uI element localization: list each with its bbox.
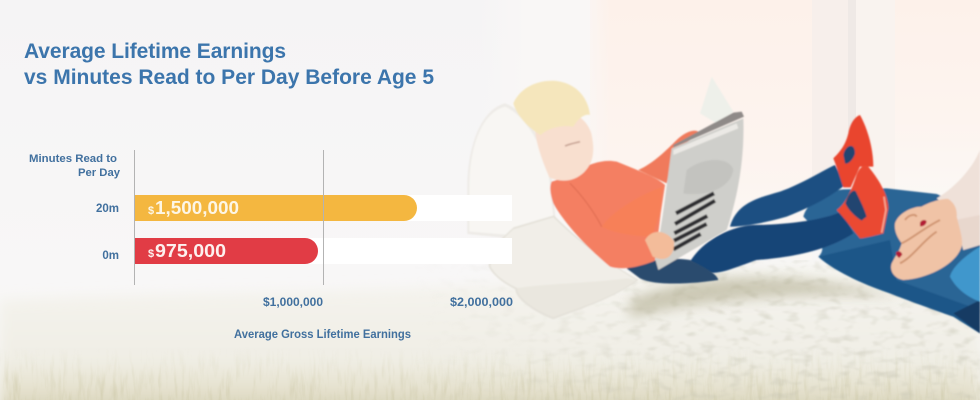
- bar value: 20m: 1,500,000: [155, 198, 239, 218]
- category label: 20m: 20m: [96, 203, 119, 215]
- title: vs Minutes Read to Per Day Before Age 5: [24, 66, 434, 89]
- x-axis title: Average Gross Lifetime Earnings: [234, 329, 411, 341]
- arm behind book: [638, 131, 698, 183]
- book cover: [655, 118, 743, 270]
- tick label: $2,000,000: $2,000,000: [450, 297, 513, 309]
- photo: fur rug: [0, 260, 980, 400]
- bar: 0m: [134, 238, 318, 264]
- tick label: $1,000,000: $1,000,000: [263, 297, 323, 309]
- photo: adult and child's legs: [690, 115, 980, 333]
- y-axis title: Minutes Read to: [29, 153, 117, 165]
- title: Average Lifetime Earnings: [24, 40, 286, 63]
- category label: 0m: 0m: [102, 250, 119, 262]
- photo: child reading on a pillow: [467, 77, 744, 319]
- hair: [513, 81, 590, 135]
- y-axis title: Per Day: [78, 167, 121, 179]
- adult blue cloth: [950, 247, 980, 302]
- title: [24, 40, 434, 89]
- track: 20m: [134, 195, 512, 221]
- track: 0m: [134, 238, 512, 264]
- hand on book: [645, 232, 674, 259]
- book back cover: [700, 77, 733, 123]
- bar value: 20m: $: [148, 205, 154, 217]
- adult jeans: [803, 188, 980, 333]
- rear leg: [730, 165, 845, 227]
- adult sleeve: [937, 150, 980, 250]
- bar value: 0m: 975,000: [155, 241, 226, 261]
- head: [535, 112, 593, 181]
- front shoe: [837, 165, 888, 238]
- sweater: [550, 161, 665, 268]
- nails: [896, 220, 927, 258]
- axis lines: [134, 150, 324, 285]
- jeans under body: [627, 259, 718, 284]
- book text stripes: [673, 193, 715, 249]
- front leg: [690, 212, 853, 273]
- bar chart: [29, 150, 513, 341]
- bar: 20m: [134, 195, 417, 221]
- adult hands: [891, 199, 962, 280]
- y-axis title: [29, 153, 121, 179]
- rear shoe: [833, 115, 873, 187]
- pillow: [467, 103, 639, 319]
- bar value: 0m: $: [148, 248, 154, 260]
